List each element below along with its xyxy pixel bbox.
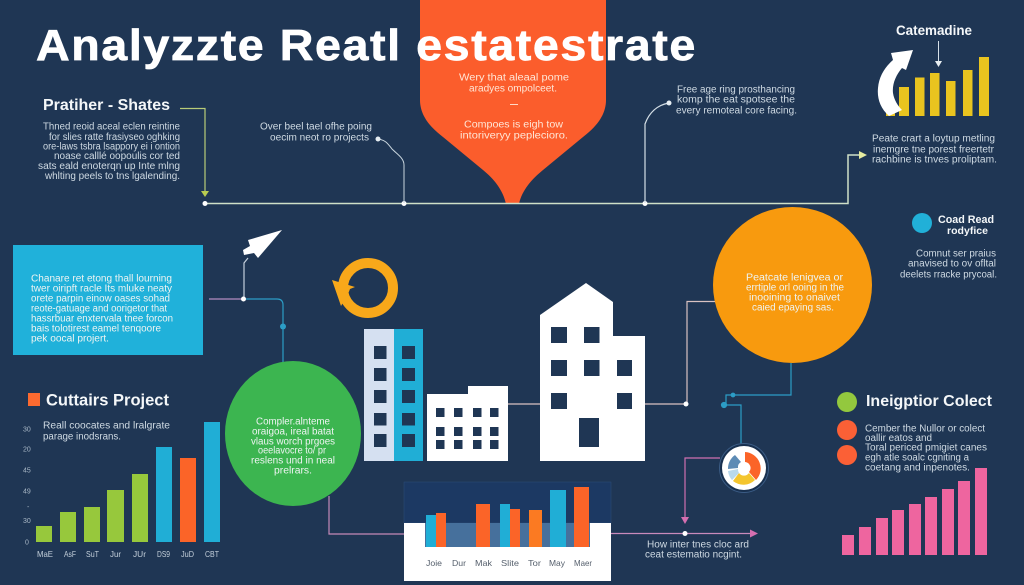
panel: orange circle: Peatcate lenigvea or xyxy=(746,272,844,284)
legend heading: rodyfice xyxy=(947,225,988,237)
panel: orange circle: caied epaying sas. xyxy=(752,302,834,314)
text block: shates description: ore-laws tsbra lsappory ei i ontion xyxy=(43,142,180,152)
description: oallir eatos and xyxy=(865,433,932,444)
panel: bottom bar chart xyxy=(404,482,611,581)
callout: free age: komp the eat spotsee the xyxy=(677,94,795,106)
bar chart: monthly bars: 30 xyxy=(23,426,31,434)
description: Toral periced pmigiet canes xyxy=(865,442,987,454)
text block: shates description: for slies ratte frasiyseo oghking xyxy=(49,132,180,143)
connector: donut to bottom arrows xyxy=(611,458,758,538)
bar chart: monthly bars: SuT xyxy=(86,549,99,559)
text block: shates description xyxy=(38,122,180,182)
connector: orange circle to donut xyxy=(722,363,791,445)
legend text: anavised to ov ofltal xyxy=(908,258,996,270)
panel: orange circle: inooining to onaivet xyxy=(749,292,840,304)
callout: over beel xyxy=(260,122,404,203)
bar chart: monthly bars: 45 xyxy=(23,468,31,474)
callout: over beel: oecim neot ro projects xyxy=(270,132,369,144)
heading: Ineigptior Colect xyxy=(866,393,992,410)
panel: blue text box: hassrbuar enxtervala tnee forcon xyxy=(31,314,173,324)
bar chart: monthly bars: JuD xyxy=(181,549,194,559)
heading: catemadine: Catemadine xyxy=(896,23,972,38)
section: inegiptor colect xyxy=(837,392,992,474)
panel: bottom bar chart: Slite xyxy=(501,558,519,568)
connector: box to green circle xyxy=(209,258,286,362)
legend text: Comnut ser praius xyxy=(916,248,996,260)
icon: tall two-tone building xyxy=(364,329,423,461)
panel: green circle: oeelavocre to/ pr xyxy=(258,446,327,456)
title: Analyzzte Reatl estatestrate xyxy=(36,20,695,70)
bar chart: monthly bars: MaE xyxy=(37,549,53,559)
connector: green circle to bottom chart xyxy=(329,496,404,534)
panel: bottom bar chart: May xyxy=(549,558,566,568)
legend heading xyxy=(938,214,994,237)
text block: chart description: parage inodsrans. xyxy=(43,432,121,442)
bar chart: monthly bars xyxy=(23,422,220,559)
bar chart: monthly bars: - xyxy=(27,504,30,511)
funnel text: intoriveryy peplecioro. xyxy=(460,130,568,142)
panel: bottom bar chart: Mak xyxy=(475,558,493,568)
bar chart: monthly bars: JUr xyxy=(133,549,146,559)
text block: chart description xyxy=(43,420,170,442)
text block: catemadine description xyxy=(872,134,997,166)
panel: green circle: Compler.alnteme xyxy=(256,416,330,428)
text block: shates description: sats eald enoterqn up Inte mlng xyxy=(38,161,180,172)
panel: green circle: vlaus worch prgoes xyxy=(251,436,335,448)
icon: white curved arrow xyxy=(878,50,913,116)
text block: catemadine description: inemgre tne porest freertetr xyxy=(873,144,995,156)
legend heading: Coad Read xyxy=(938,214,994,226)
icon: circular arrow xyxy=(332,263,393,313)
arrow: catemadine down xyxy=(935,41,942,67)
panel: blue text box: pek oocal projert. xyxy=(31,334,109,344)
legend text: deelets rracke prycoal. xyxy=(900,270,997,280)
text block: shates description: whlting peels to tns lgalending. xyxy=(44,171,180,182)
panel: orange circle xyxy=(713,207,872,363)
callout: free age xyxy=(645,84,797,203)
bar chart: monthly bars: 49 xyxy=(23,488,31,496)
bar chart: monthly bars: AsF xyxy=(64,549,76,559)
icon: large white building xyxy=(540,283,645,461)
bar chart: pink bars xyxy=(842,468,987,555)
text block: catemadine description: Peate crart a loytup metling xyxy=(872,134,995,144)
panel: green circle xyxy=(225,361,361,506)
panel: blue text box: orete parpin einow oases sohad xyxy=(31,294,170,304)
panel: bottom bar chart: Dur xyxy=(452,558,466,568)
description: coetang and inpenotes. xyxy=(865,462,970,474)
callout: over beel: Over beel tael ofhe poing xyxy=(260,122,372,132)
orange funnel panel xyxy=(420,0,606,204)
text block: bottom caption xyxy=(645,540,749,560)
text block: shates description: Thned reoid aceal eclen reintine xyxy=(43,122,180,132)
icon: low white building xyxy=(427,386,508,461)
panel: blue text box: bais tolotirest eamel tenqoore xyxy=(31,324,161,334)
funnel text: aradyes ompolceet. xyxy=(469,84,557,94)
bar chart: monthly bars: 30 xyxy=(23,518,31,525)
heading: cuttairs project: Cuttairs Project xyxy=(46,392,169,410)
panel: bottom bar chart: Maer xyxy=(574,558,592,568)
arrow: shates to timeline xyxy=(180,108,209,197)
panel: bottom bar chart: Tor xyxy=(528,558,541,568)
callout: free age: every remoteal core facing. xyxy=(676,106,797,116)
text block: bottom caption: ceat estematio ncgint. xyxy=(645,550,742,560)
panel: green circle: reslens und in neal xyxy=(251,456,335,466)
text block: catemadine description: rachbine is tnves proliptam. xyxy=(872,154,997,166)
icon: donut chart xyxy=(720,444,768,492)
legend: coad read xyxy=(900,213,997,280)
bar chart: monthly bars: CBT xyxy=(205,549,219,559)
panel: orange circle: errtiple orl ooing in the xyxy=(746,282,844,294)
panel: green circle: prelrars. xyxy=(274,466,312,476)
bar chart: monthly bars: 0 xyxy=(25,540,29,546)
funnel text xyxy=(459,72,569,142)
panel: blue text box: Chanare ret etong thall lourning xyxy=(31,274,172,284)
icon: blue dot xyxy=(912,213,932,233)
panel: green circle: oraigoa, ireal batat xyxy=(252,426,334,438)
funnel text: Wery that aleaal pome xyxy=(459,72,569,84)
panel: blue text box: reote-gatuage and oorigetor that xyxy=(31,304,167,314)
callout: free age: Free age ring prosthancing xyxy=(677,84,795,96)
connector: buildings xyxy=(508,302,716,406)
text block: bottom caption: How inter tnes cloc ard xyxy=(647,540,749,550)
panel: bottom bar chart: Joie xyxy=(426,558,442,568)
icon: green dot xyxy=(837,392,857,412)
description xyxy=(865,424,987,474)
funnel text: Compoes is eigh tow xyxy=(464,120,564,130)
description: egh atle soalc cgniting a xyxy=(865,452,969,464)
panel: blue text box xyxy=(13,245,203,355)
description: Cember the Nullor or colect xyxy=(865,424,985,434)
panel: blue text box: twer oiripft racle Its mluke neaty xyxy=(31,284,172,294)
bar chart: yellow bars xyxy=(886,57,989,116)
icon: paper plane xyxy=(243,230,282,258)
icons: orange dots xyxy=(837,420,857,465)
bar chart: monthly bars: DS9 xyxy=(157,549,170,559)
timeline connector xyxy=(202,151,867,206)
text block: chart description: Reall coocates and lralgrate xyxy=(43,420,170,432)
heading: pratiher shates: Pratiher - Shates xyxy=(43,97,170,114)
bar chart: monthly bars: 20 xyxy=(23,446,31,454)
bar chart: monthly bars: Jur xyxy=(110,549,121,559)
legend text xyxy=(900,248,997,280)
text block: shates description: noase calllé oopoulis cor ted xyxy=(54,151,180,162)
